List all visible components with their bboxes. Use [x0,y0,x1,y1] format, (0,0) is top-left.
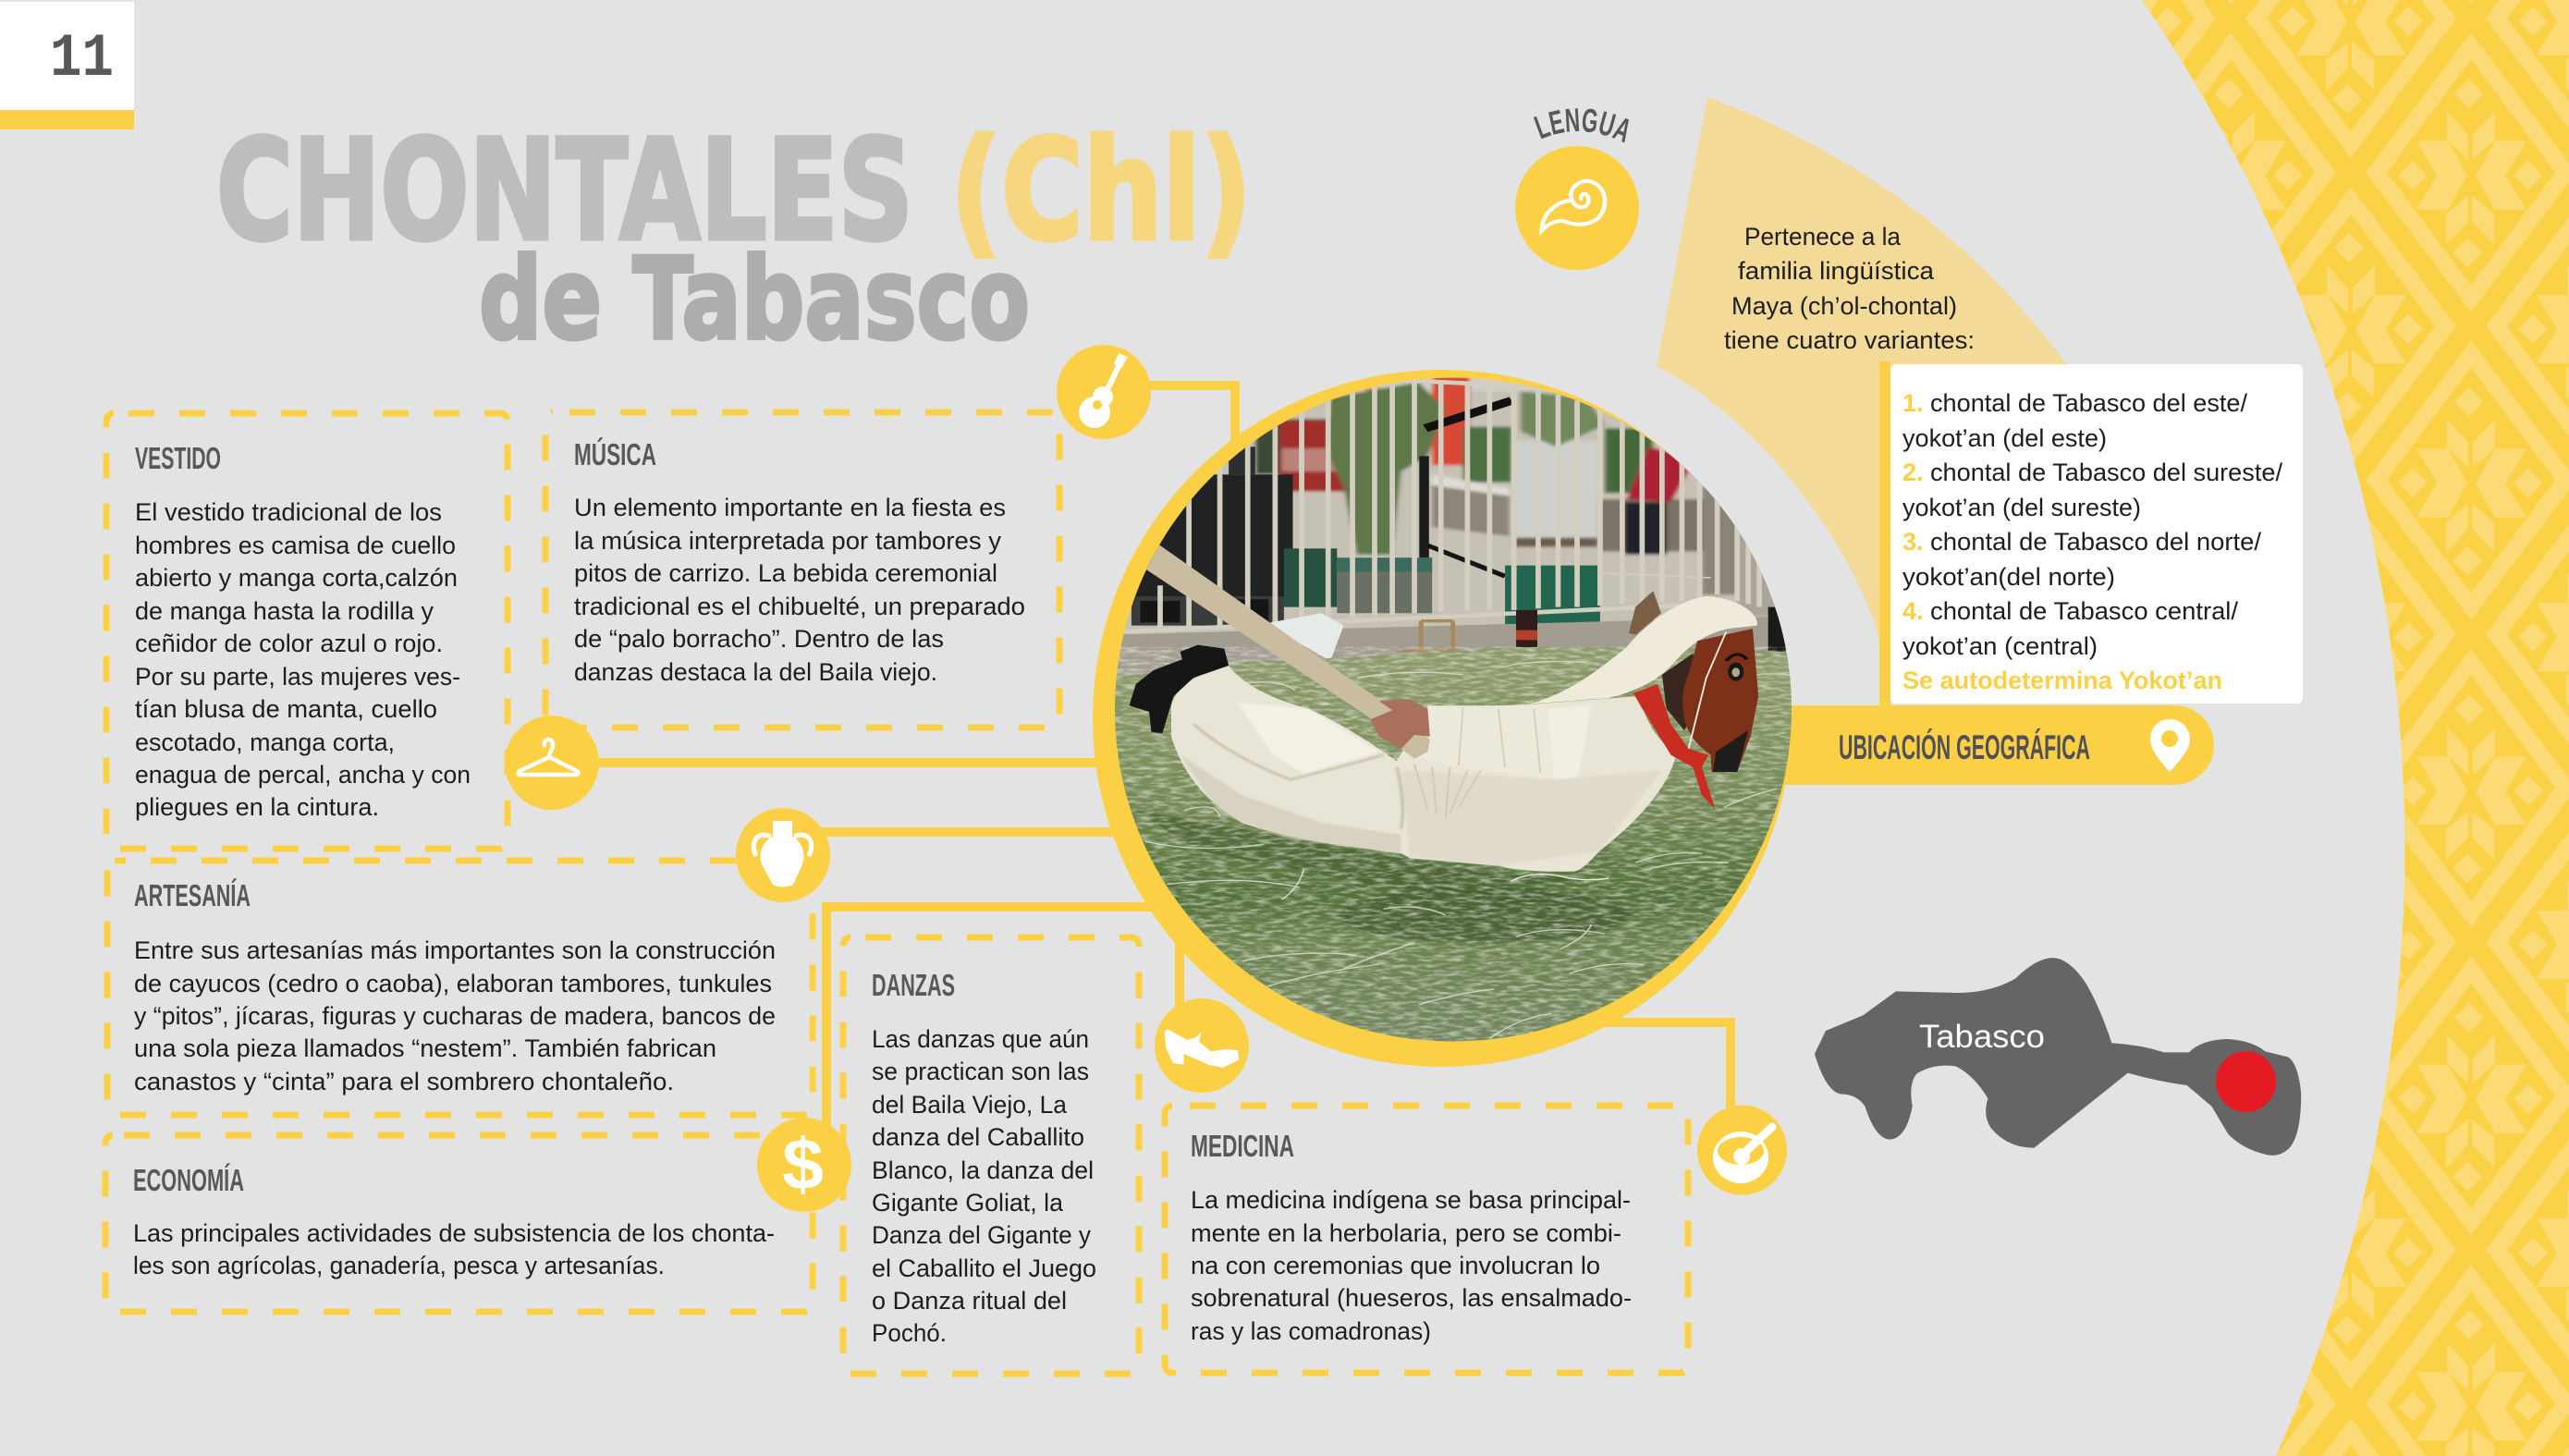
panel: economía: les son agrícolas, ganadería, pesca y artesanías. [133,1252,665,1279]
panel: language variants: 2. [1902,459,1924,486]
lengua intro text: tiene cuatro variantes: [1724,326,1975,354]
hand [1370,700,1430,749]
icon: speech swirl [1515,146,1639,270]
panel: vestido: tían blusa de manta, cuello [135,695,437,723]
lengua intro text: familia lingüística [1738,257,1935,285]
panel: danzas: Las danzas que aún [872,1025,1089,1053]
hair [1529,596,1757,704]
panel: medicina: MEDICINA [1191,1129,1294,1163]
title: CHONTALES [216,111,913,272]
panel: medicina: na con ceremonias que involucran lo [1191,1252,1600,1279]
background textile pattern [2034,0,2569,1456]
panel: medicina: ras y las comadronas) [1191,1317,1431,1345]
icon: hanger [505,716,599,810]
panel: vestido [106,413,508,849]
panel: danzas: se practican son las [872,1058,1089,1085]
panel: música: Un elemento importante en la fiesta es [574,494,1006,521]
panel: vestido: escotado, manga corta, [135,728,395,756]
planters [1284,548,1337,607]
panel: artesanía: canastos y “cinta” para el sombrero chontaleño. [134,1068,674,1095]
ground [1109,617,1794,681]
panel: language variants: chontal de Tabasco del norte/ [1930,528,2261,556]
panel: artesanía: una sola pieza llamados “nestem”. También fabrican [134,1034,716,1062]
title: (Chl) [950,111,1252,272]
stick [1144,544,1430,759]
panel: language variants: chontal de Tabasco del sureste/ [1930,459,2282,486]
panel: language variants: chontal de Tabasco del este/ [1930,389,2247,417]
panel: danzas: del Baila Viejo, La [872,1091,1068,1119]
map: Tabasco [1815,958,2301,1156]
panel: language variants: yokot’an (central) [1902,632,2098,660]
page number tab [0,2,134,129]
panel: música: danzas destaca la del Baila viejo. [574,658,937,686]
panel: música: MÚSICA [574,437,656,471]
panel: language variants: chontal de Tabasco central/ [1930,597,2239,625]
title: de Tabasco [479,234,1030,365]
location bar [1756,705,2214,785]
grass [1109,647,1804,1047]
icon: dollar: $ [782,1123,824,1205]
page number tab: 11 [50,24,114,93]
panel: vestido: Por su parte, las mujeres ves- [135,663,460,691]
lengua intro text: Maya (ch’ol-chontal) [1731,292,1957,320]
panel: música: pitos de carrizo. La bebida ceremonial [574,559,997,587]
panel: danzas: o Danza ritual del [872,1287,1067,1315]
lengua heading and icon [1515,108,1639,270]
photo: masked dancer lying on grass [1093,370,1808,1067]
panel: language variants: 4. [1902,597,1924,625]
panel: medicina: sobrenatural (hueseros, las ensalmado- [1191,1284,1632,1312]
icon: shoe [1155,998,1249,1093]
panel: música: la música interpretada por tambores y [574,527,1002,555]
panel: danzas: el Caballito el Juego [872,1254,1096,1282]
panel: language variants: yokot’an (del este) [1902,424,2107,452]
panel: vestido: hombres es camisa de cuello [135,532,456,559]
speaker [1132,474,1292,598]
panel: language variants: Se autodetermina Yokot’an [1902,667,2222,694]
panel: danzas: Danza del Gigante y [872,1221,1091,1249]
panel: lengua wedge [1657,97,2071,704]
lengua intro text: Pertenece a la [1744,223,1902,251]
panel: medicina: mente en la herbolaria, pero se combi- [1191,1219,1621,1247]
panel: artesanía: Entre sus artesanías más importantes son la construcción [134,936,776,964]
panel: vestido: de manga hasta la rodilla y [135,597,434,625]
panel: language variants: 3. [1902,528,1924,556]
map: Tabasco: Tabasco [1919,1019,2045,1055]
icon: vase [736,808,830,902]
lengua heading and icon: LENGUA [1534,108,1629,142]
icon: guitar [1057,345,1151,439]
location bar: UBICACIÓN GEOGRÁFICA [1839,728,2090,766]
panel: vestido: VESTIDO [135,441,221,475]
panel: vestido: enagua de percal, ancha y con [135,761,471,789]
panel: economía: ECONOMÍA [133,1163,244,1197]
panel: música [545,412,1059,728]
panel: vestido: abierto y manga corta,calzón [135,564,458,592]
fence [1122,380,1759,631]
panel: danzas: Pochó. [872,1319,947,1347]
panel: language variants: yokot’an(del norte) [1902,563,2115,591]
panel: artesanía: ARTESANÍA [134,878,251,912]
panel: language variants: 1. [1902,389,1924,417]
panel: danzas [843,937,1139,1374]
icon: dollar [757,1118,851,1212]
head and mask [1662,653,1694,730]
lengua intro text [1724,223,1975,354]
title [216,111,1252,365]
connector lines [592,385,1731,1128]
shoe [1130,645,1229,733]
panel: artesanía: de cayucos (cedro o caoba), elaboran tambores, tunkules [134,970,772,997]
icon: map pin [2150,719,2190,772]
panel: artesanía [107,861,813,1115]
panel: danzas: DANZAS [872,968,955,1002]
panel: danzas: Blanco, la danza del [872,1156,1094,1184]
panel: música: de “palo borracho”. Dentro de las [574,625,944,653]
man: garments [1171,666,1675,872]
icon: mortar [1697,1106,1787,1194]
panel: language variants [1879,361,2303,705]
panel: danzas: Gigante Goliat, la [872,1189,1064,1217]
panel: economía: Las principales actividades de subsistencia de los chonta- [133,1219,775,1247]
panel: language variants: yokot’an (del sureste) [1902,494,2141,521]
panel: vestido: pliegues en la cintura. [135,793,379,821]
panel: economía [105,1135,813,1312]
panel: medicina: La medicina indígena se basa principal- [1191,1186,1631,1214]
panel: música: tradicional es el chibuelté, un preparado [574,593,1025,620]
panel: medicina [1165,1106,1688,1373]
panel: artesanía: y “pitos”, jícaras, figuras y cucharas de madera, bancos de [134,1002,776,1030]
panel: vestido: ceñidor de color azul o rojo. [135,630,443,657]
panel: vestido: El vestido tradicional de los [135,498,442,526]
panel: danzas: danza del Caballito [872,1123,1084,1151]
